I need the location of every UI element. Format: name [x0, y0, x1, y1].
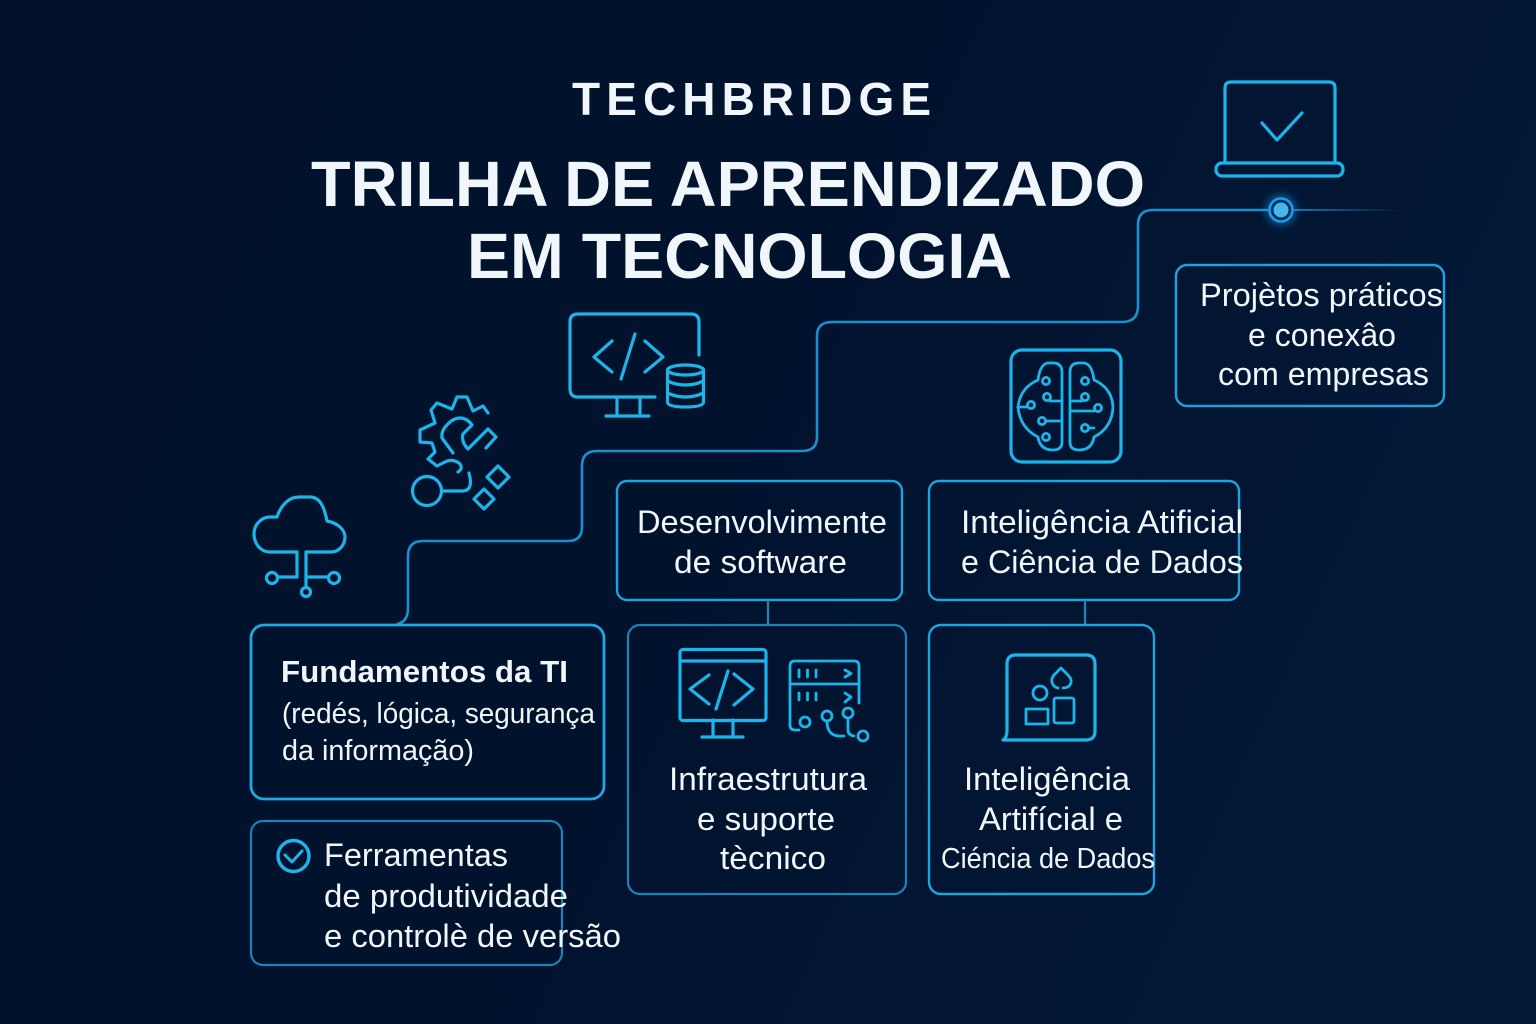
panel: inteligência artificial top	[929, 481, 1243, 600]
icon: server circuit	[790, 661, 868, 741]
path node	[1267, 196, 1295, 224]
panel: ferramentas: de produtividade	[324, 878, 568, 914]
panel: desenvolvimento de software	[617, 481, 902, 600]
brand name: TECHBRIDGE	[572, 73, 931, 125]
icon: gear and wrench	[412, 397, 509, 509]
panel: inteligência artificial details: Inteligência	[964, 761, 1131, 797]
panel: inteligência artificial details	[929, 625, 1155, 894]
icon: check circle	[278, 840, 309, 872]
panel: ferramentas: Ferramentas	[324, 837, 508, 873]
panel: projetos práticos: com empresas	[1218, 356, 1429, 392]
icon: laptop with check	[1216, 82, 1343, 176]
icon: shapes bubble	[1003, 655, 1095, 740]
panel: fundamentos da TI: da informação)	[282, 735, 474, 767]
title: EM TECNOLOGIA	[467, 220, 1012, 292]
panel: desenvolvimento de software: de software	[674, 544, 847, 580]
panel: projetos práticos: e conexâo	[1248, 317, 1396, 353]
icon: brain	[1011, 350, 1121, 462]
panel: projetos práticos: Projètos práticos	[1200, 277, 1443, 313]
learning path line	[397, 210, 1268, 624]
panel: ferramentas: e controlè de versão	[324, 918, 621, 954]
path end fade line	[1293, 209, 1400, 211]
icon: cloud network	[254, 497, 345, 596]
panel: fundamentos da TI: Fundamentos da TI	[281, 654, 568, 689]
panel: fundamentos da TI	[251, 625, 604, 799]
panel: infraestrutura: tècnico	[720, 840, 826, 876]
panel: inteligência artificial top: e Ciência de Dados	[961, 544, 1243, 580]
panel: inteligência artificial details: Ciéncia de Dados	[941, 843, 1155, 875]
icon: monitor with code and database	[570, 314, 704, 416]
panel: infraestrutura: e suporte	[697, 801, 835, 837]
panel: ferramentas	[251, 821, 621, 965]
connector: software to infrastructure	[767, 600, 769, 625]
panel: projetos práticos	[1176, 265, 1444, 406]
panel: desenvolvimento de software: Desenvolvimente	[637, 504, 887, 540]
panel: infraestrutura: Infraestrutura	[669, 761, 868, 797]
title	[311, 148, 1145, 292]
title: TRILHA DE APRENDIZADO	[311, 148, 1145, 220]
panel: infraestrutura	[628, 625, 906, 894]
panel: fundamentos da TI: (redés, lógica, segurança	[282, 698, 596, 730]
icon: code window monitor	[680, 650, 766, 737]
panel: inteligência artificial details: Artifícial e	[979, 801, 1123, 837]
connector: AI to AI details	[1084, 600, 1086, 625]
panel: inteligência artificial top: Inteligência Atificial	[961, 504, 1243, 540]
